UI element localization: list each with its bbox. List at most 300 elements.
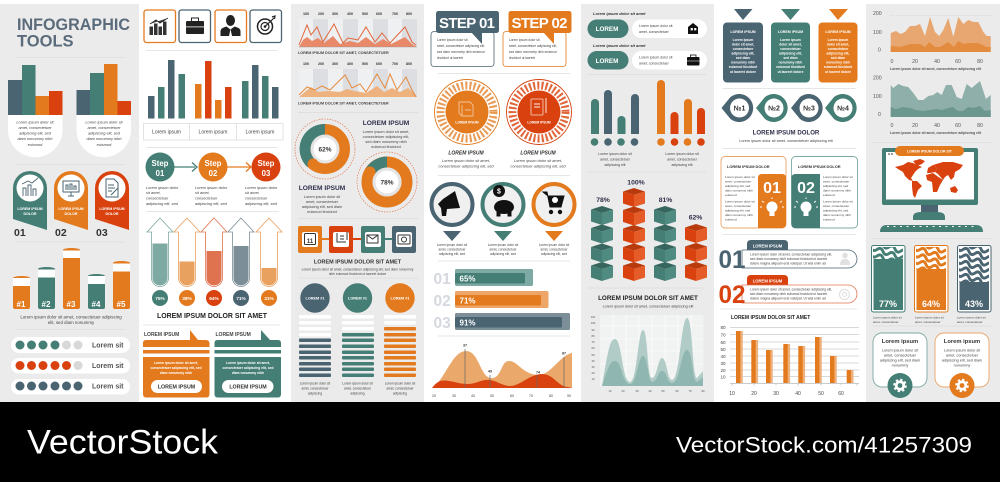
- badge 02: 02: [55, 227, 67, 239]
- pill row 1: Lorem ipsum dolor sit: [639, 24, 672, 28]
- icon process flow: 11: [307, 239, 314, 245]
- badge 02: DOLOR: [65, 212, 78, 216]
- step 02 callout: sed diam nonummy nibh euismod: [509, 50, 557, 54]
- card 01: LOREM IPSUM DOLOR: [727, 164, 770, 169]
- heading: LOREM IPSUM DOLOR SIT AMET: [157, 313, 268, 320]
- area chart with pins: 70: [529, 394, 533, 398]
- caption: Lorem ipsum dolor sit amet, consectetuer adipiscing elit: [739, 139, 834, 143]
- progress bar 02: [434, 291, 548, 310]
- mountain area chart: 10: [591, 377, 595, 381]
- card 02: diam nonummy nibh: [823, 188, 851, 192]
- column chart: 50: [720, 347, 726, 352]
- rounded bar chart left: amet, consectetuer: [600, 158, 631, 162]
- card 01: diam nonummy nibh: [725, 213, 753, 217]
- tank 43%: 43%: [965, 299, 983, 309]
- info card slate: [723, 9, 763, 82]
- progress bar 03: 91%: [460, 318, 476, 328]
- mountain area chart: 20: [621, 389, 625, 393]
- numbered row 02: 02: [718, 281, 746, 309]
- tank 43%: amet, consectetuer: [957, 320, 983, 324]
- numbered row 02: Lorem ipsum dolor sit amet, consectetuer adipiscing elit,: [750, 288, 832, 292]
- table of labels: Lorem ipsum: [152, 130, 181, 136]
- line chart 1: 800: [406, 12, 412, 16]
- column chart: 80: [720, 325, 726, 330]
- icon circle: piggy bank: [482, 184, 524, 256]
- arrow tube 4: 71%: [236, 296, 247, 302]
- area chart teal: 100: [873, 94, 882, 100]
- numbered row 01: sed diam nonummy nibh euismod tincidunt ut laoreet: [750, 257, 827, 261]
- column chart: 60: [720, 340, 726, 345]
- line chart 2: LOREM IPSUM DOLOR SIT AMET, CONSECTETUER: [298, 102, 389, 106]
- gear card orange: adipiscing elit, sed diam: [942, 358, 982, 362]
- icon circle: piggy bank: amet, consectetuer: [489, 248, 517, 252]
- rating row 1: Lorem sit: [92, 342, 124, 350]
- round badge: red: [506, 80, 572, 144]
- stacked column 1: Lorem ipsum dolor sit: [300, 382, 330, 386]
- gear card teal: adipiscing elit, sed diam: [880, 358, 920, 362]
- mountain area chart: [591, 315, 705, 393]
- arrow tube 2: 38%: [182, 296, 193, 302]
- title: INFOGRAPHIC: [17, 16, 130, 34]
- info card teal: [771, 9, 810, 82]
- tank 77%: Lorem ipsum dolor sit: [873, 316, 902, 320]
- line chart 1: 700: [392, 12, 398, 16]
- pill row 1: amet, consectetuer: [639, 30, 670, 34]
- gear card teal: amet, consectetuer: [884, 354, 917, 358]
- gear card orange: nonummy: [954, 364, 970, 368]
- donut 62%: [295, 119, 355, 179]
- cube chart: 78%: [596, 197, 610, 204]
- column chart: 20: [720, 368, 726, 373]
- callout card: orange: [143, 330, 210, 398]
- card 02: 02: [797, 180, 815, 197]
- bar group 1: diam nonummy nibh: [17, 136, 53, 141]
- icon: chart: [144, 10, 176, 42]
- gear card teal: [873, 333, 927, 398]
- area chart with pins: 90: [567, 394, 571, 398]
- cylinder chart: #2: [42, 300, 51, 309]
- line chart 2: 400: [347, 62, 353, 66]
- stacked column 3: amet, consectetuer: [386, 386, 414, 390]
- arrow tube 5: 31%: [264, 296, 275, 302]
- info card teal: dolor sit amet,: [779, 42, 802, 46]
- step 01 callout: amet, consectetuer adipiscing elit,: [437, 44, 485, 48]
- step 02 callout: amet, consectetuer adipiscing elit,: [509, 44, 557, 48]
- step text: Lorem ipsum dolor: [146, 185, 179, 190]
- gear card teal: Lorem ipsum dolor sit: [882, 348, 919, 352]
- table of labels: Lorem ipsum: [246, 130, 274, 136]
- heading: LOREM IPSUM DOLOR SIT AMET: [598, 295, 698, 302]
- stacked column 3: adipiscing: [393, 392, 407, 396]
- line chart 1: 100: [303, 12, 309, 16]
- step text: Lorem ipsum dolor: [195, 185, 228, 190]
- bar group 2: [76, 64, 131, 157]
- mountain area chart: 30: [591, 365, 595, 369]
- rounded bar chart right: amet, consectetuer: [667, 158, 698, 162]
- line chart 1: [298, 12, 417, 55]
- tank 64%: amet, consectetuer: [915, 320, 941, 324]
- bar group 2: amet, consectetuer: [87, 125, 121, 130]
- step 01 callout: sed diam nonummy nibh euismod: [437, 50, 485, 54]
- card 01: Lorem ipsum dolor sit: [725, 175, 755, 179]
- area chart with pins: 50: [490, 394, 494, 398]
- panel: column 1: [0, 4, 139, 402]
- callout card: orange: consectetuer adipiscing elit, sed: [151, 366, 201, 370]
- stacked column 1: adipiscing: [308, 392, 322, 396]
- brand name: VectorStock: [27, 424, 219, 462]
- card 02: adipiscing elit, sed: [823, 184, 849, 188]
- badge captions: LOREM IPSUM: [448, 150, 484, 156]
- callout card: teal: consectetuer adipiscing elit, sed: [223, 366, 273, 370]
- step flow: 02: [209, 169, 218, 178]
- area chart teal: 200: [873, 76, 882, 82]
- area chart with pins: 49: [488, 370, 492, 374]
- column chart: LOREM IPSUM DOLOR SIT AMET: [731, 315, 810, 321]
- area chart orange: [873, 11, 992, 71]
- bar group 1: amet, consectetuer: [18, 125, 52, 130]
- icon circle: cart: Lorem ipsum dolor sit: [539, 243, 569, 247]
- grouped bar chart: [148, 60, 278, 118]
- icon circle: cart: [534, 184, 574, 256]
- cylinder chart: #1: [17, 300, 26, 309]
- text block: [363, 120, 410, 149]
- stacked column 2: amet, consectetuer: [344, 386, 372, 390]
- area chart teal: 0: [891, 123, 894, 129]
- card 02: Lorem ipsum dolor sit: [823, 200, 853, 204]
- column chart: [720, 315, 859, 397]
- badge 01: [13, 171, 47, 239]
- world map: [895, 159, 963, 198]
- callout card: teal: LOREM IPSUM: [229, 384, 267, 390]
- icon circle: megaphone: [432, 184, 472, 256]
- area chart teal: 80: [977, 123, 983, 129]
- mountain area chart: 110: [591, 315, 596, 319]
- numbered row 01: dolore magna aliquam erat volutpat. Ut wisi enim ad: [750, 262, 826, 266]
- stacked column 3: LOREM #1: [390, 296, 410, 300]
- tank 64%: [914, 245, 948, 324]
- info card teal: euismod tincidunt: [776, 65, 806, 69]
- line chart 2: 300: [332, 62, 338, 66]
- rating row 2: Lorem sit: [92, 363, 124, 370]
- line chart 1: 600: [376, 12, 382, 16]
- area chart with pins: 40: [471, 394, 475, 398]
- text block: sed diam nonummy nibh: [365, 140, 407, 144]
- cylinder chart: #5: [117, 300, 126, 309]
- card 02: euismod: [823, 193, 835, 197]
- area chart orange: 200: [873, 11, 882, 17]
- step flow: Step: [205, 159, 222, 168]
- info card teal: nonummy nibh: [779, 60, 802, 64]
- badge captions: LOREM IPSUM: [520, 150, 556, 156]
- info card slate: dolor sit amet,: [732, 42, 754, 46]
- donut 78%: 78%: [380, 180, 394, 186]
- pill row 2: amet, consectetuer: [639, 62, 670, 66]
- step text: sit amet,: [195, 190, 210, 195]
- cylinder chart: [13, 248, 130, 309]
- numbered teardrops: [722, 94, 857, 122]
- badge captions: consectetuer adipiscing elit, sed: [438, 164, 494, 168]
- mountain area chart: 20: [591, 371, 595, 375]
- rounded bar chart right: [657, 80, 705, 167]
- line chart 1: 300: [332, 12, 338, 16]
- tank 64%: Lorem ipsum dolor sit: [915, 316, 944, 320]
- cube chart: [591, 180, 707, 281]
- numbered row 01: 01: [718, 246, 746, 274]
- step text: consectetuer: [146, 196, 169, 200]
- info card teal: sed diam: [783, 56, 798, 60]
- panel: column 3: [291, 4, 424, 402]
- step flow: [146, 152, 280, 182]
- round badge: orange: LOREM IPSUM: [455, 120, 479, 124]
- info card teal: ut laoreet dolore: [778, 70, 804, 74]
- info card slate: ut laoreet dolore: [730, 70, 756, 74]
- badge 03: DOLOR: [106, 212, 119, 216]
- column chart: 70: [720, 332, 726, 338]
- progress bar 01: 01: [434, 271, 451, 288]
- mountain area chart: 100: [591, 321, 596, 325]
- info card slate: LOREM IPSUM: [730, 30, 756, 34]
- badge 02: [54, 171, 88, 239]
- card 01: 01: [763, 180, 781, 197]
- area chart with pins: 60: [510, 394, 514, 398]
- icon circle: cart: amet, consectetuer: [540, 248, 568, 252]
- stacked column 3: [384, 283, 416, 396]
- card 01: [721, 156, 786, 228]
- step text: adipiscing elit, sed: [146, 201, 179, 206]
- step 01 callout: Lorem ipsum dolor sit: [437, 38, 468, 42]
- info card teal: adipiscing elit,: [779, 52, 802, 56]
- cylinder chart: #4: [92, 300, 101, 309]
- area chart with pins: 20: [432, 394, 436, 398]
- progress bar 02: 02: [434, 293, 451, 310]
- progress bar 01: 65%: [460, 274, 476, 284]
- donut 78%: [357, 152, 417, 212]
- pill row 1: Lorem ipsum dolor sit amet: [593, 11, 646, 16]
- mountain area chart: 80: [701, 389, 705, 393]
- step text: sit amet,: [245, 190, 260, 195]
- line chart 2: 700: [392, 62, 398, 66]
- line chart 1: LOREM IPSUM DOLOR SIT AMET, CONSECTETUER: [298, 51, 389, 55]
- gear card orange: Lorem ipsum: [944, 339, 980, 345]
- step flow: 01: [156, 169, 165, 178]
- pill row 2: LOREM: [596, 58, 618, 65]
- gear card orange: amet, consectetuer: [946, 354, 979, 358]
- area chart with pins: [432, 344, 572, 398]
- gear card orange: Lorem ipsum dolor sit: [944, 348, 981, 352]
- card 02: diam nonummy nibh: [823, 213, 851, 217]
- column chart: 20: [751, 391, 757, 397]
- column chart: 40: [720, 354, 726, 359]
- step text: adipiscing elit, sed: [195, 201, 228, 206]
- panel: column 7: [865, 4, 1000, 402]
- text block: LOREM IPSUM: [363, 120, 410, 127]
- stacked column 1: LOREM #1: [306, 296, 324, 300]
- area chart orange: 20: [912, 59, 918, 65]
- bar group 1: Lorem ipsum dolor sit: [16, 120, 55, 124]
- rounded bar chart left: adipiscing elit: [604, 163, 626, 167]
- pill row 2: Lorem ipsum dolor sit: [639, 56, 672, 60]
- info card orange: adipiscing elit,: [827, 52, 850, 56]
- pill row 2: Lorem ipsum dolor sit amet: [593, 43, 646, 48]
- info card orange: [818, 9, 858, 82]
- caption: Lorem ipsum dolor sit amet, consectetuer adipiscing elit, sed diam nonummy: [302, 268, 414, 272]
- stacked column 1: amet, consectetuer: [301, 386, 329, 390]
- icon circle: megaphone: amet, consectetuer: [438, 248, 466, 252]
- numbered teardrops: №2: [768, 104, 780, 112]
- mountain area chart: 60: [591, 346, 595, 350]
- step 01 callout: STEP 01: [439, 15, 495, 32]
- step 02 callout: tincidunt ut laoreet: [509, 56, 535, 60]
- info card orange: euismod tincidunt: [824, 65, 853, 69]
- card 02: euismod: [823, 218, 835, 222]
- card 02: amet, consectetuer: [823, 204, 849, 208]
- heading: LOREM IPSUM DOLOR: [753, 130, 820, 136]
- pill row 2: [588, 43, 707, 70]
- bar group 2: euismod: [97, 142, 112, 147]
- card 01: euismod: [725, 193, 737, 197]
- gear card orange: [935, 333, 989, 398]
- area chart teal: Lorem ipsum dolor sit amet, consectetuer adipiscing elit: [890, 131, 982, 135]
- area chart with pins: 37: [463, 344, 467, 348]
- area chart teal: [873, 76, 992, 135]
- mountain area chart: 50: [591, 353, 595, 357]
- text block: amet, consectetuer: [306, 200, 339, 204]
- arrow tube 4: [228, 218, 254, 306]
- stacked column 1: [299, 283, 331, 396]
- line chart 1: 200: [318, 12, 324, 16]
- rating row 3: [11, 379, 130, 394]
- numbered row 01: Lorem ipsum dolor sit amet, consectetuer adipiscing elit,: [750, 252, 832, 256]
- callout card: orange: diam nonummy nibh: [160, 371, 192, 375]
- step flow: 03: [262, 169, 271, 178]
- text block: euismod tincidunt: [371, 145, 402, 149]
- line chart 1: 400: [347, 12, 353, 16]
- card 02: Lorem ipsum dolor sit: [823, 175, 853, 179]
- icon circle: megaphone: adipiscing elit, sed: [439, 252, 465, 256]
- tank 77%: [871, 245, 906, 324]
- numbered teardrops: №1: [734, 104, 745, 112]
- callout card: teal: [214, 330, 281, 398]
- step flow: Step: [152, 159, 169, 168]
- table of labels: Lorem ipsum: [199, 130, 227, 136]
- area chart orange: 0: [891, 59, 894, 65]
- area chart orange: 100: [873, 30, 882, 36]
- mountain area chart: 90: [591, 328, 595, 332]
- progress bar 02: 71%: [460, 296, 476, 306]
- mountain area chart: 80: [591, 334, 595, 338]
- stacked column 2: LOREM #1: [348, 296, 367, 300]
- column chart: 10: [729, 391, 735, 397]
- bar group 1: adipiscing elit, sed: [19, 130, 52, 136]
- badge captions: Lorem ipsum dolor sit amet,: [442, 158, 490, 163]
- arrow tube 2: [174, 218, 200, 306]
- callout card: orange: LOREM IPSUM: [158, 384, 196, 390]
- rounded bar chart left: Lorem ipsum dolor sit: [598, 152, 632, 156]
- step 01 callout: tincidunt ut laoreet: [437, 56, 463, 60]
- mountain area chart: 10: [608, 389, 612, 393]
- gear card teal: Lorem ipsum: [882, 339, 918, 345]
- tank 77%: 77%: [879, 299, 897, 309]
- progress bar 03: [434, 313, 570, 332]
- cube chart: 100%: [627, 180, 645, 186]
- tank 43%: [957, 245, 992, 324]
- numbered row 01: [718, 240, 857, 274]
- badge 03: 03: [96, 227, 108, 239]
- card 01: Lorem ipsum dolor sit: [725, 200, 755, 204]
- arrow tube 1: 75%: [155, 296, 166, 302]
- heading: LOREM IPSUM DOLOR SIT AMET: [314, 260, 402, 266]
- arrow tube 1: [147, 218, 173, 306]
- mountain area chart: 60: [675, 389, 679, 393]
- column chart: 60: [838, 391, 844, 397]
- rounded bar chart right: Lorem ipsum dolor sit: [665, 152, 699, 156]
- icon circle: piggy bank: Lorem ipsum dolor sit: [488, 243, 518, 247]
- info card teal: consectetuer: [780, 47, 801, 51]
- area chart teal: 40: [934, 123, 940, 129]
- line chart 1: 500: [362, 12, 368, 16]
- card 01: diam nonummy nibh: [725, 188, 753, 192]
- column chart: 30: [720, 361, 726, 366]
- area chart orange: 80: [977, 59, 983, 65]
- text block: [299, 185, 346, 214]
- panel: column 2: [143, 10, 283, 398]
- column chart: 50: [818, 391, 824, 397]
- text block: Lorem ipsum dolor sit: [304, 195, 341, 199]
- card 01: adipiscing elit, sed: [725, 184, 751, 188]
- info card orange: sed diam: [831, 56, 845, 60]
- line chart 2: 100: [303, 62, 309, 66]
- icon circle: piggy bank: adipiscing elit, sed: [490, 252, 516, 256]
- badge captions: Lorem ipsum dolor sit amet,: [514, 158, 562, 163]
- cube chart: 81%: [659, 197, 672, 204]
- bar group 2: Lorem ipsum dolor sit: [85, 120, 124, 124]
- badge captions: [438, 150, 566, 168]
- badge 03: [95, 171, 129, 239]
- caption: Lorem ipsum dolor sit amet, consectetuer adipiscing: [20, 314, 122, 320]
- numbered row 02: LOREM IPSUM: [753, 278, 783, 284]
- caption: Lorem ipsum dolor sit amet, consectetuer adipiscing elit: [603, 304, 693, 308]
- title: TOOLS: [17, 32, 74, 50]
- pill row 1: [588, 11, 707, 38]
- badge captions: consectetuer adipiscing elit, sed: [510, 164, 566, 168]
- info card orange: Lorem ipsum: [828, 38, 848, 42]
- info card teal: LOREM IPSUM: [778, 30, 803, 34]
- bar group 2: adipiscing elit, sed: [88, 130, 121, 136]
- callout card: teal: Lorem ipsum dolor sit amet,: [226, 361, 270, 365]
- step text: adipiscing elit, sed: [245, 201, 278, 206]
- mountain area chart: 30: [635, 389, 639, 393]
- info card slate: Lorem ipsum: [733, 38, 753, 42]
- step 01 callout: [431, 11, 499, 66]
- column chart: 10: [720, 374, 726, 380]
- area chart orange: Lorem ipsum dolor sit amet, consectetuer adipiscing elit: [890, 67, 982, 71]
- table of labels: [144, 124, 283, 140]
- numbered row 02: [718, 275, 857, 309]
- panel: column 5: [581, 4, 714, 402]
- column chart: 40: [795, 391, 801, 397]
- step 02 callout: [503, 11, 572, 66]
- rating row 3: Lorem sit: [92, 384, 124, 390]
- area chart orange: 60: [955, 59, 961, 65]
- round badge: orange: [434, 80, 500, 144]
- info card teal: Lorem ipsum: [780, 38, 801, 42]
- step flow: Step: [258, 159, 275, 168]
- card 02: LOREM IPSUM DOLOR: [798, 164, 841, 169]
- area chart with pins: 74: [536, 370, 540, 374]
- step text: consectetuer: [245, 196, 268, 200]
- monitor with world map: LOREM IPSUM DOLOR SIT: [907, 150, 953, 154]
- callout card: orange: LOREM IPSUM: [144, 332, 179, 338]
